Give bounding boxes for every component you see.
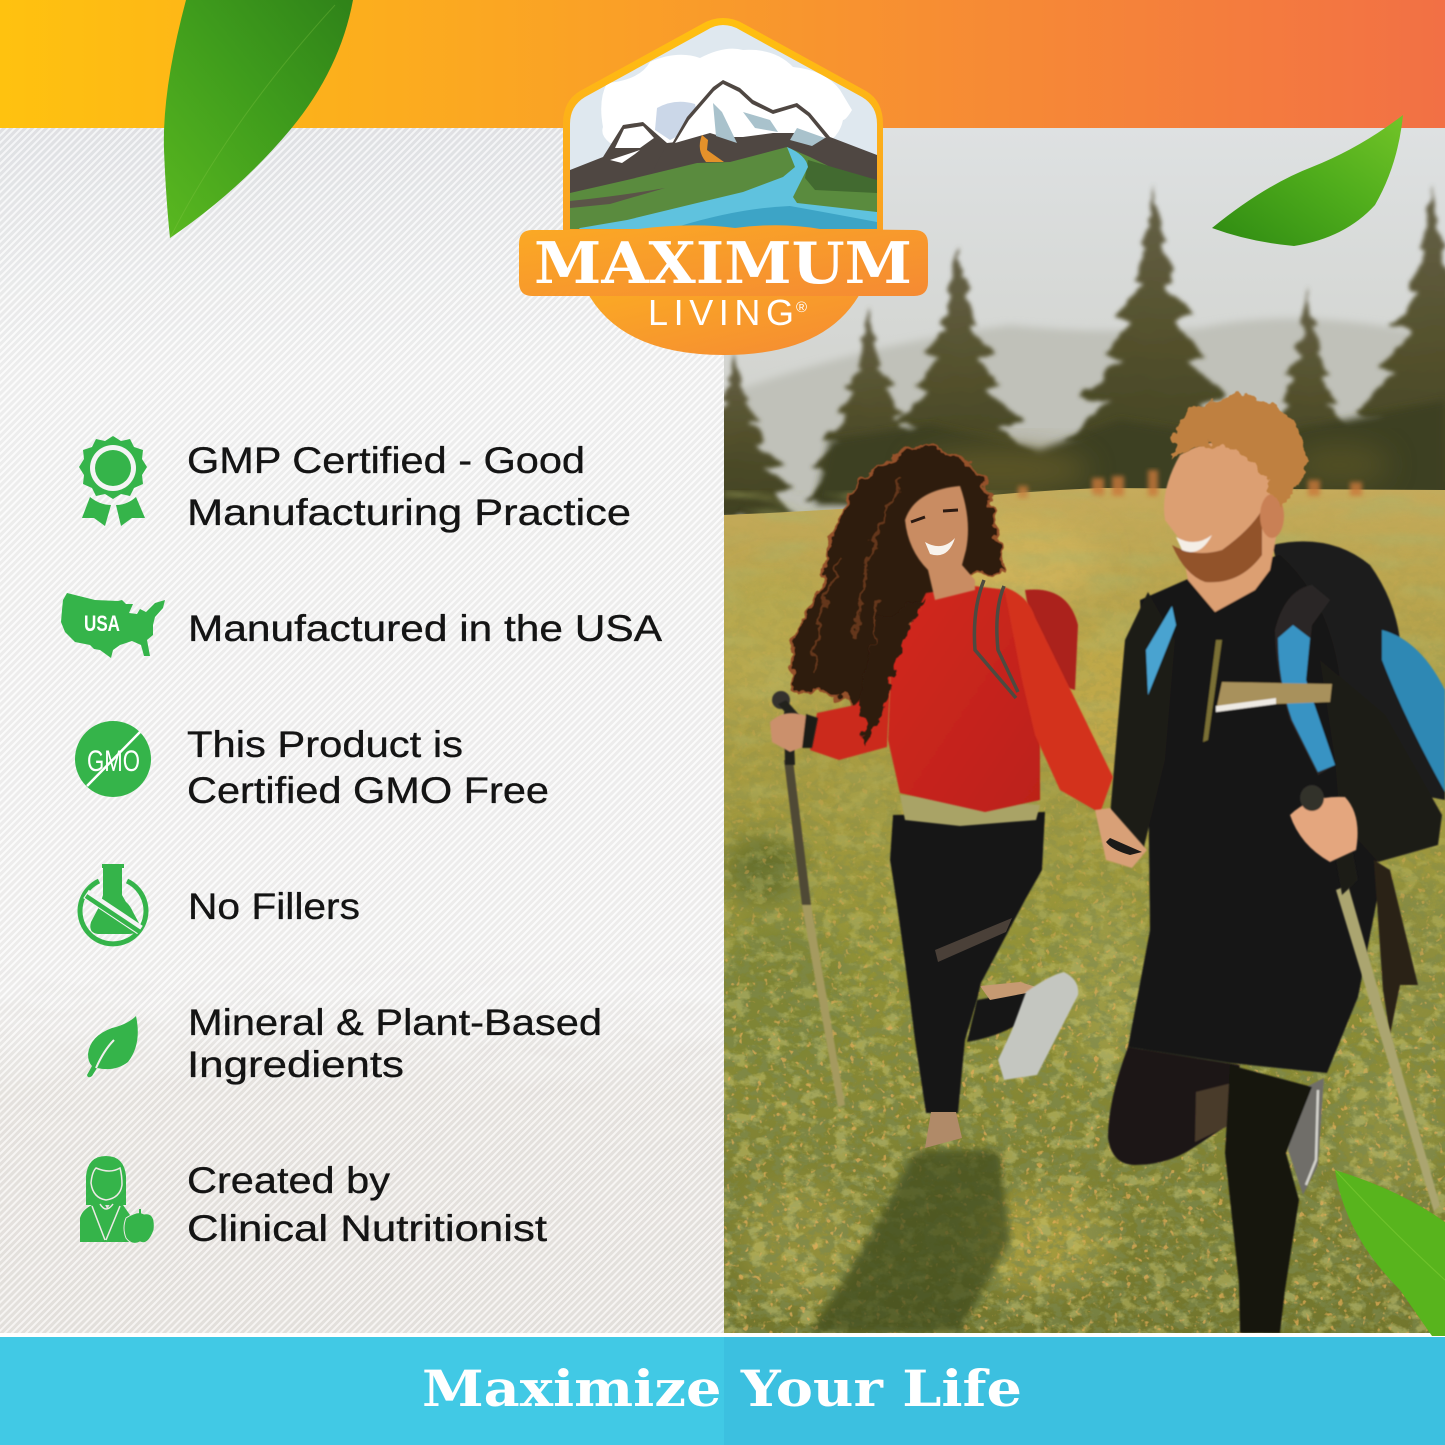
text: GMO line 2: Certified GMO Free (187, 770, 549, 811)
leaf: top right (1212, 115, 1403, 246)
woman: hand left (770, 713, 818, 752)
woman: hair over shoulder (860, 598, 925, 745)
icon: rosette (79, 436, 147, 526)
foreground shadow (810, 1150, 1010, 1333)
woman: right sleeve (1004, 587, 1113, 813)
man: neck and face (1164, 441, 1283, 612)
man: shorts and torso (1128, 555, 1377, 1073)
icon: leaf (87, 1016, 138, 1077)
logo: dark green (805, 160, 877, 193)
text: nutritionist line 2: Clinical Nutritionist (187, 1208, 548, 1249)
man: chest stripe white (1216, 698, 1276, 712)
woman: backpack (1025, 589, 1078, 690)
woman: shoe (998, 972, 1078, 1080)
logo: blue cloud (655, 102, 700, 140)
grass texture (724, 657, 1445, 1333)
logo: brown strip (570, 188, 665, 208)
meadow (724, 488, 1445, 1333)
man: ear (1260, 494, 1284, 538)
text: plant line 2: Ingredients (187, 1044, 404, 1085)
man: right arm (1332, 686, 1443, 863)
logo: river (575, 147, 877, 232)
logo: Maximum Living badge (519, 18, 928, 355)
woman: rear lower leg (967, 990, 1034, 1042)
text: GMP line 2: Manufacturing Practice (187, 492, 631, 533)
leaf: top left (164, 0, 353, 238)
meadow light and shadow patches (710, 515, 1445, 1300)
logo: orange rock (700, 135, 724, 162)
woman: hair highlights (815, 480, 900, 720)
tagline: Maximize Your Life (422, 1359, 1022, 1418)
logo: banner (519, 225, 928, 296)
tree base mass (815, 400, 1445, 505)
man (1108, 441, 1445, 1333)
woman: left sleeve (810, 668, 891, 760)
logo: large mountain (640, 80, 877, 195)
woman: leggings (890, 812, 1045, 1113)
tree line (671, 187, 1445, 517)
logo: lower dome (586, 290, 862, 355)
man: backpack (1272, 541, 1445, 800)
man: beard (1172, 510, 1262, 582)
logo: registered mark: ® (796, 299, 807, 316)
distant grass streaks (724, 490, 1444, 878)
photo sky (724, 128, 1445, 408)
text: nutritionist line 1: Created by (187, 1160, 391, 1201)
icon: nutritionist with apple (80, 1156, 154, 1243)
panel: hikers photo (671, 128, 1445, 1333)
woman: ankle (980, 982, 1046, 1018)
woman: ankle front (925, 1112, 962, 1148)
woman: hair (788, 447, 1005, 745)
woman: eyes and smile (911, 510, 958, 555)
man: rear shoe (1288, 1078, 1324, 1195)
feature: plant based (87, 1002, 602, 1085)
woman: mesh panel (935, 918, 1012, 962)
woman: hem (900, 795, 1040, 826)
feature: GMO free (75, 721, 549, 811)
feature: GMP certified (79, 436, 631, 533)
man: smile (1176, 535, 1212, 552)
woman: sweater body (888, 586, 1040, 812)
text: no fillers: No Fillers (188, 886, 360, 927)
man: left blue strap (1146, 606, 1176, 695)
woman: held hands (1095, 808, 1147, 868)
logo: snowcap (675, 84, 826, 143)
logo: small mountain (570, 122, 700, 195)
logo: snow shadows (713, 103, 825, 146)
feature: clinical nutritionist (80, 1156, 548, 1249)
logo: MAXIMUM wordmark: MAXIMUM (534, 230, 912, 297)
icon: no GMO: GMO (87, 745, 140, 778)
logo: mountain scene (565, 20, 880, 240)
panel: left textured background (0, 128, 724, 1334)
man: blue strap padding (1278, 625, 1335, 772)
logo: river shadow (680, 206, 877, 232)
man: rear calf (1194, 1083, 1230, 1142)
man: hand and grip (1290, 785, 1358, 862)
text: USA: Manufactured in the USA (188, 608, 662, 649)
man: chest stripe (1217, 682, 1332, 706)
logo: LIVING wordmark: LIVING (648, 292, 794, 333)
woman (770, 447, 1147, 1148)
man: left arm (1110, 592, 1151, 848)
text: GMO line 1: This Product is (187, 724, 463, 765)
logo: green hills (570, 147, 877, 240)
man: front leg (1225, 1065, 1312, 1333)
icon: crossed flask (80, 864, 146, 944)
man: pole (1326, 795, 1440, 1212)
man: zip (1203, 640, 1222, 742)
woman: trekking pole (772, 691, 845, 1107)
feature: made in USA (61, 593, 662, 658)
logo: snow streak (610, 150, 640, 163)
man: hanging strap (1374, 860, 1418, 1035)
woman: face and neck (905, 486, 975, 600)
leaf: bottom right (1335, 1170, 1445, 1336)
logo: rim (563, 18, 883, 240)
distant hills (724, 319, 1445, 520)
text: plant line 1: Mineral & Plant-Based (188, 1002, 602, 1043)
man: rear leg (1108, 1047, 1240, 1165)
logo: small snowcap (615, 126, 654, 148)
icon: USA map (61, 593, 165, 658)
sunlit branches (910, 443, 1390, 492)
logo: clouds (601, 49, 852, 150)
man: shoulder strap (1275, 585, 1335, 775)
icon: no GMO (75, 721, 151, 797)
text: GMP line 1: GMP Certified - Good (187, 440, 585, 481)
man: cuff over hands (1106, 838, 1142, 855)
icon: USA map: USA (84, 611, 120, 636)
man: hair (1172, 396, 1306, 505)
orange flowers at the horizon (1018, 470, 1362, 498)
feature: no fillers (80, 864, 360, 944)
top orange gradient band (0, 0, 1445, 128)
woman: pack straps (974, 580, 1018, 698)
bottom blue band (0, 1333, 1445, 1445)
